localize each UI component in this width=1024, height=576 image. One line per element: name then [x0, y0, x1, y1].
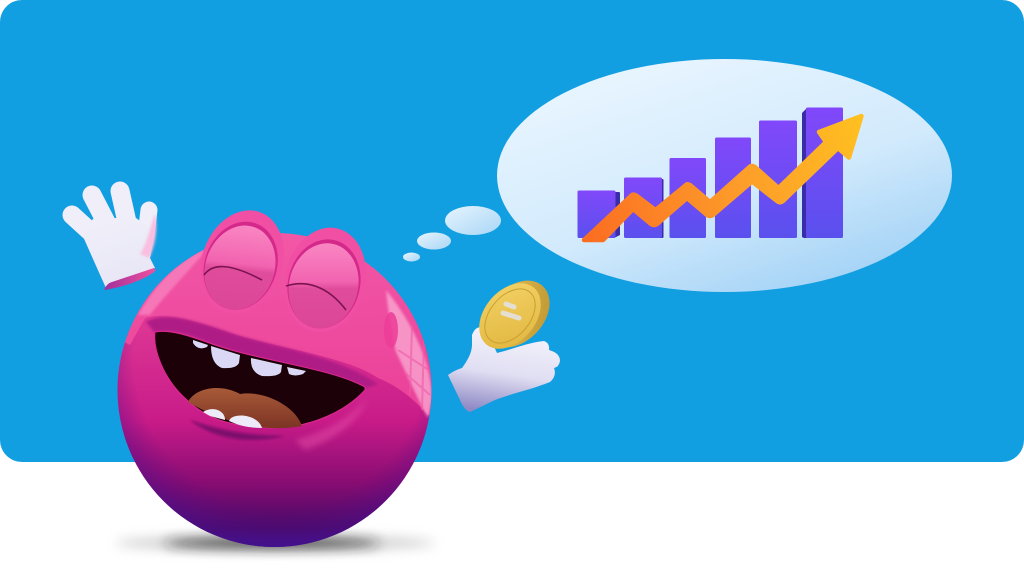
- lower lip shadow: [190, 420, 285, 440]
- ball body: [118, 233, 432, 547]
- tongue: [188, 388, 302, 428]
- arrow: [584, 116, 862, 240]
- bars: [578, 108, 843, 238]
- ball rim shading: [118, 233, 432, 547]
- left eye: [186, 199, 298, 325]
- dark oval reflection: [384, 312, 398, 348]
- right eye: [273, 219, 377, 341]
- mouth: [155, 331, 365, 428]
- lower teeth: [203, 409, 262, 428]
- thought bubble: [403, 59, 952, 292]
- glove fingers: [72, 191, 149, 236]
- coin edge: [471, 268, 563, 360]
- glove pink reflection: [140, 214, 156, 258]
- left glove: [72, 191, 156, 290]
- glove cuff: [104, 268, 155, 290]
- coin inner ring: [475, 279, 545, 353]
- right glove with coin: [448, 268, 563, 412]
- glove hand: [448, 327, 560, 412]
- glove palm: [81, 218, 155, 288]
- lower cheek highlight: [296, 405, 364, 450]
- upper lip shadow: [146, 317, 378, 388]
- coin emblem: [503, 304, 519, 318]
- right eyelid line: [286, 284, 346, 310]
- pink ball character: [118, 210, 432, 547]
- ground shadow: [115, 536, 435, 550]
- bubble: tiny: [403, 252, 420, 262]
- bubble: small: [417, 232, 451, 250]
- left eyelid line: [204, 267, 262, 280]
- bar chart with rising arrow: [578, 108, 862, 240]
- upper teeth: [193, 340, 306, 376]
- coin: [467, 268, 563, 361]
- window reflection: [386, 290, 432, 418]
- upper face: [124, 233, 432, 450]
- bubble: medium: [445, 206, 501, 235]
- bubble: large: [497, 59, 952, 292]
- coin face: [467, 271, 553, 361]
- left edge highlight: [138, 248, 208, 315]
- window grid: [398, 325, 432, 410]
